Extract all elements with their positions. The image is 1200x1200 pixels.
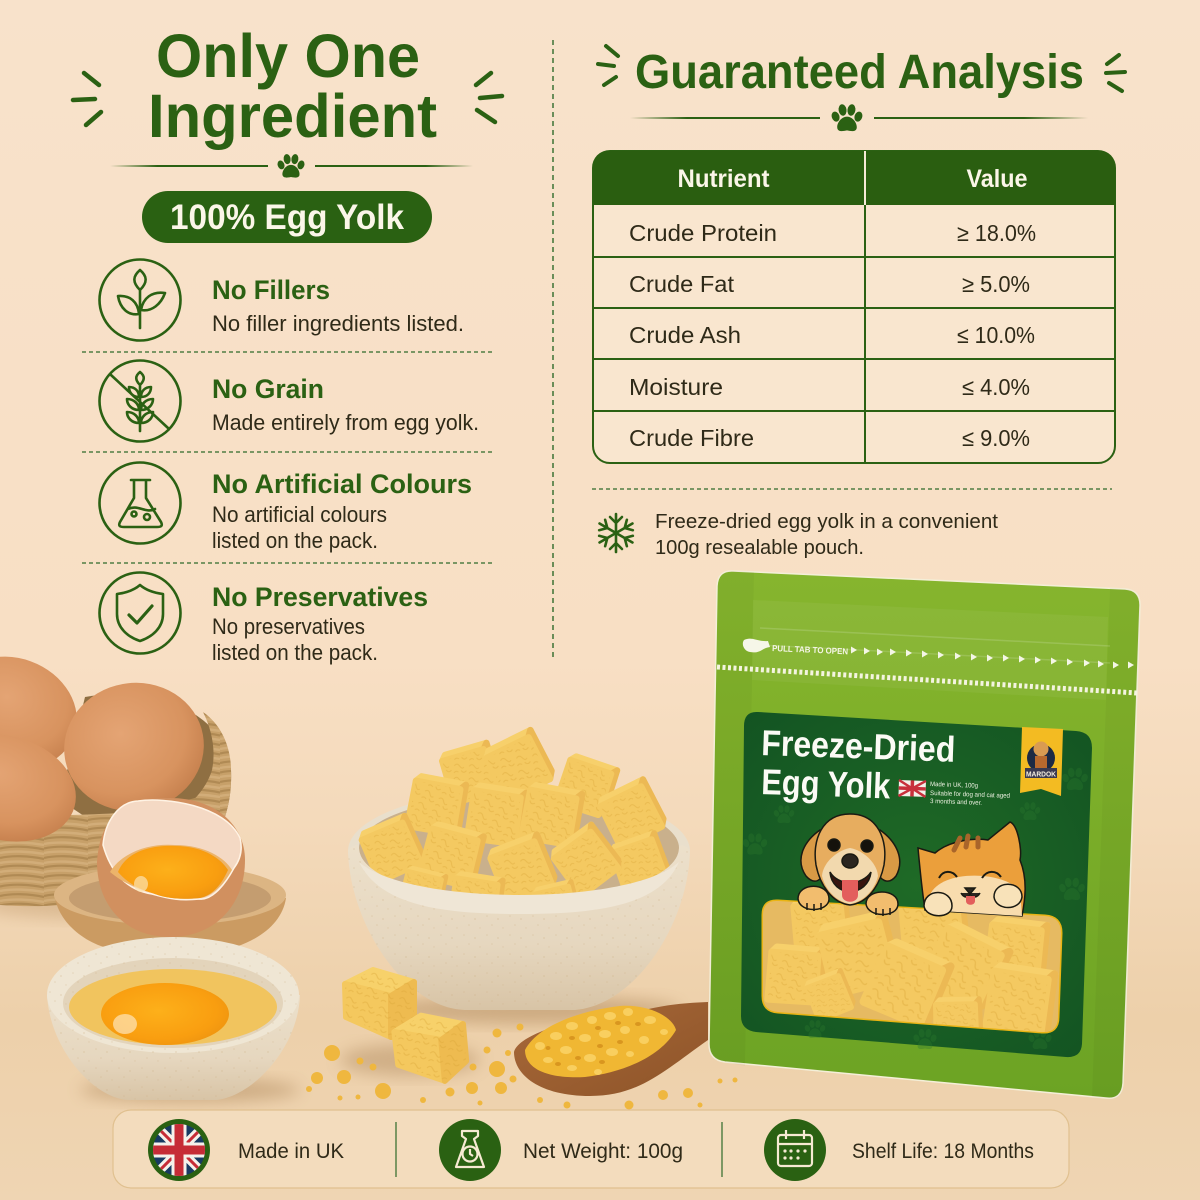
icon: flask <box>100 462 180 544</box>
table header <box>593 151 1115 205</box>
description: listed on the pack. <box>212 640 378 665</box>
table rows: Crude Fat <box>629 271 735 297</box>
table: nutrient values <box>593 151 1115 463</box>
basket <box>0 694 231 906</box>
description: No artificial colours <box>212 502 387 527</box>
panel: guaranteed analysis <box>592 46 1125 559</box>
table rows: ≥ 18.0% <box>957 220 1036 246</box>
feature: No Preservatives <box>100 572 428 665</box>
photo: cracked egg on wooden dish <box>54 798 286 952</box>
icon: left title sparkle rays <box>73 73 101 125</box>
illustration: cat <box>918 822 1025 916</box>
note: freeze-dried pouch <box>655 510 998 559</box>
table rows: ≤ 10.0% <box>957 322 1035 348</box>
feature: No Fillers <box>100 260 464 340</box>
brand ribbon: Mardok <box>1020 727 1063 796</box>
pouch title <box>761 722 956 807</box>
icon: small UK flag <box>898 780 926 797</box>
info bar <box>113 1110 1069 1188</box>
crumb mound <box>525 1006 676 1077</box>
icon: weighing scale <box>439 1119 501 1181</box>
raw egg <box>69 969 277 1045</box>
description <box>212 502 387 553</box>
table rows: ≤ 9.0% <box>962 425 1030 451</box>
photo: egg yolk in ceramic bowl <box>47 937 300 1102</box>
title: Only One Ingredient: Ingredient <box>148 82 437 150</box>
pouch small text: Suitable for dog and cat aged <box>930 790 1010 800</box>
pouch small text: Made in UK, 100g <box>930 781 978 790</box>
heading: No Artificial Colours <box>212 469 472 499</box>
note: freeze-dried pouch: 100g resealable pouch. <box>655 536 864 559</box>
feature: No Grain <box>100 360 479 442</box>
title: Only One Ingredient: Only One <box>156 22 420 90</box>
title: Guaranteed Analysis: Guaranteed Analysis <box>635 46 1084 99</box>
spoon <box>514 1002 708 1096</box>
icon: shield check <box>100 572 180 654</box>
illustration: dog <box>798 814 900 916</box>
table rows: Crude Protein <box>629 220 777 246</box>
bowl back <box>348 790 690 912</box>
wooden dish <box>54 865 286 952</box>
bowl front <box>348 845 690 1010</box>
label: Made in UK: Made in UK <box>238 1140 344 1163</box>
heading: No Preservatives <box>212 582 428 612</box>
pouch label panel <box>741 712 1092 1057</box>
table rows: Crude Fibre <box>629 425 754 451</box>
photo: bowl of freeze-dried cubes <box>348 729 690 1024</box>
table rows <box>629 220 1036 451</box>
zigzag tear line <box>717 667 1137 693</box>
icon: snowflake <box>597 514 635 552</box>
pouch seal bands <box>709 571 1140 1098</box>
brand ribbon: Mardok: MARDOK <box>1026 770 1057 778</box>
description: No preservatives <box>212 614 365 639</box>
table rows: ≥ 5.0% <box>962 271 1030 297</box>
table rows: Moisture <box>629 374 723 400</box>
tear arrows <box>851 646 1134 668</box>
icon: calendar <box>764 1119 826 1181</box>
pouch small text: 3 months and over. <box>930 798 982 807</box>
description: listed on the pack. <box>212 528 378 553</box>
heading: No Grain <box>212 374 324 404</box>
table header: Nutrient <box>678 165 770 193</box>
pull tab <box>743 639 848 656</box>
panel: only one ingredient <box>73 22 502 665</box>
pouch title: Freeze-Dried <box>761 722 956 770</box>
title: Only One Ingredient <box>148 22 437 150</box>
table header: Value <box>966 165 1028 193</box>
bowl <box>47 995 300 1100</box>
pill: 100% Egg Yolk: 100% Egg Yolk <box>170 198 404 237</box>
label: Shelf Life: Shelf Life: 18 Months <box>852 1140 1034 1163</box>
description: No filler ingredients listed. <box>212 311 464 336</box>
icon: right heading rays <box>1106 55 1125 91</box>
icon: UK flag <box>148 1119 210 1181</box>
note: freeze-dried pouch: Freeze-dried egg yolk in a convenient <box>655 510 998 533</box>
photo: loose cubes <box>340 970 480 1085</box>
heading: No Fillers <box>212 275 330 305</box>
pull tab: PULL TAB TO OPEN <box>772 643 848 656</box>
table rows: Crude Ash <box>629 322 741 348</box>
table rows: ≤ 4.0% <box>962 374 1030 400</box>
pouch title: Egg Yolk <box>761 761 892 807</box>
eggs <box>0 639 214 857</box>
icon: crossed grain <box>100 360 180 442</box>
divider with paw <box>110 154 473 178</box>
description <box>212 614 378 665</box>
scattered crumbs <box>306 1024 738 1110</box>
egg shell <box>97 798 245 937</box>
feature: No Artificial Colours <box>100 462 472 553</box>
pill: 100% Egg Yolk <box>142 191 432 243</box>
pouch small text <box>930 781 1010 807</box>
label: Net Weight: Net Weight: 100g <box>523 1140 683 1163</box>
product: pouch <box>709 571 1140 1098</box>
window with cubes <box>762 900 1062 1034</box>
divider with paw <box>630 104 1088 131</box>
icon: leaf sprout <box>100 260 180 340</box>
description: Made entirely from egg yolk. <box>212 410 479 435</box>
icon: left heading rays <box>598 46 618 85</box>
photo: egg basket <box>0 639 240 919</box>
icon: right title sparkle rays <box>476 73 502 122</box>
paw pattern <box>742 767 1089 1049</box>
photo: wooden spoon with crumbs <box>306 1002 738 1110</box>
cubes in bowl <box>360 729 671 928</box>
